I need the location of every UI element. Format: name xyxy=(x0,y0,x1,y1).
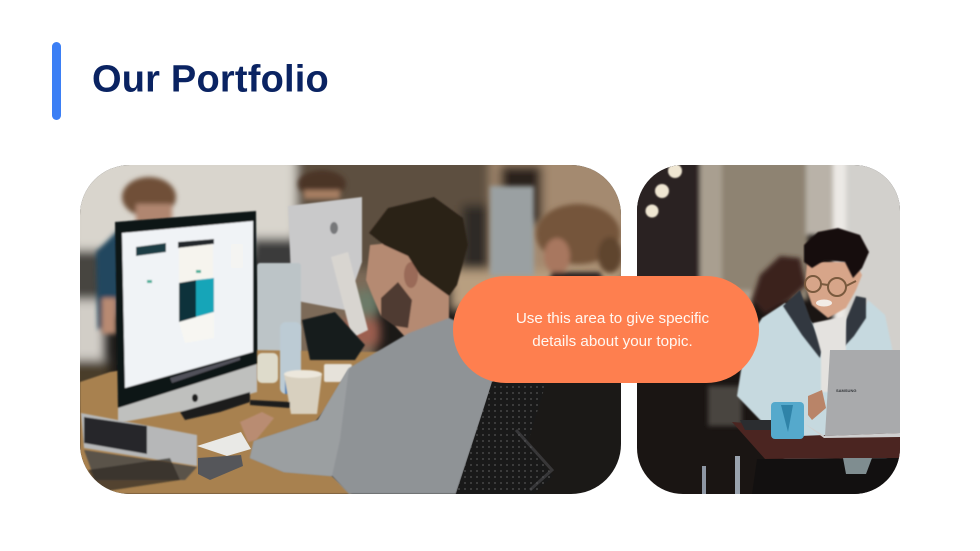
desk items xyxy=(250,312,365,414)
glasses xyxy=(805,276,856,296)
smile xyxy=(816,300,832,306)
t-shirt xyxy=(813,316,846,392)
laptop: SAMSUNG xyxy=(836,388,856,393)
desk xyxy=(80,350,380,494)
rear monitor xyxy=(288,197,368,338)
keyboard xyxy=(197,432,251,456)
hand xyxy=(808,390,826,420)
person in back, left xyxy=(96,177,176,334)
phone on table xyxy=(740,420,772,430)
stack of paper xyxy=(257,263,301,353)
table xyxy=(732,422,900,459)
photo: smiling person with laptop xyxy=(630,160,906,494)
laptop on stand xyxy=(81,413,197,492)
callout pill xyxy=(453,276,759,383)
mesh chair xyxy=(456,382,553,494)
desktop monitor xyxy=(115,211,257,423)
accent bar xyxy=(52,42,61,120)
laptop xyxy=(805,350,900,438)
photo: team working at computers xyxy=(70,155,630,494)
silver column xyxy=(490,186,534,276)
hanging lights xyxy=(646,164,682,218)
notebook xyxy=(198,455,243,480)
man: grey sweater xyxy=(250,318,500,494)
jacket xyxy=(736,300,892,459)
woman in back, right xyxy=(536,204,622,285)
legs below table xyxy=(752,458,900,494)
face xyxy=(805,262,862,318)
title: Our Portfolio xyxy=(92,58,329,100)
blue mug xyxy=(771,402,804,439)
man: head, neck and hair xyxy=(366,197,468,340)
blurred office background xyxy=(70,155,630,410)
person in back, centre xyxy=(298,170,346,199)
cafe background xyxy=(630,160,906,426)
hair xyxy=(804,228,869,278)
callout text: details about your topic. xyxy=(532,333,693,350)
hoodie xyxy=(783,290,823,358)
callout text xyxy=(516,310,710,350)
callout text: Use this area to give specific xyxy=(516,310,710,327)
jacket hem xyxy=(843,458,872,474)
woman behind xyxy=(752,256,806,314)
man: hand xyxy=(240,412,274,442)
